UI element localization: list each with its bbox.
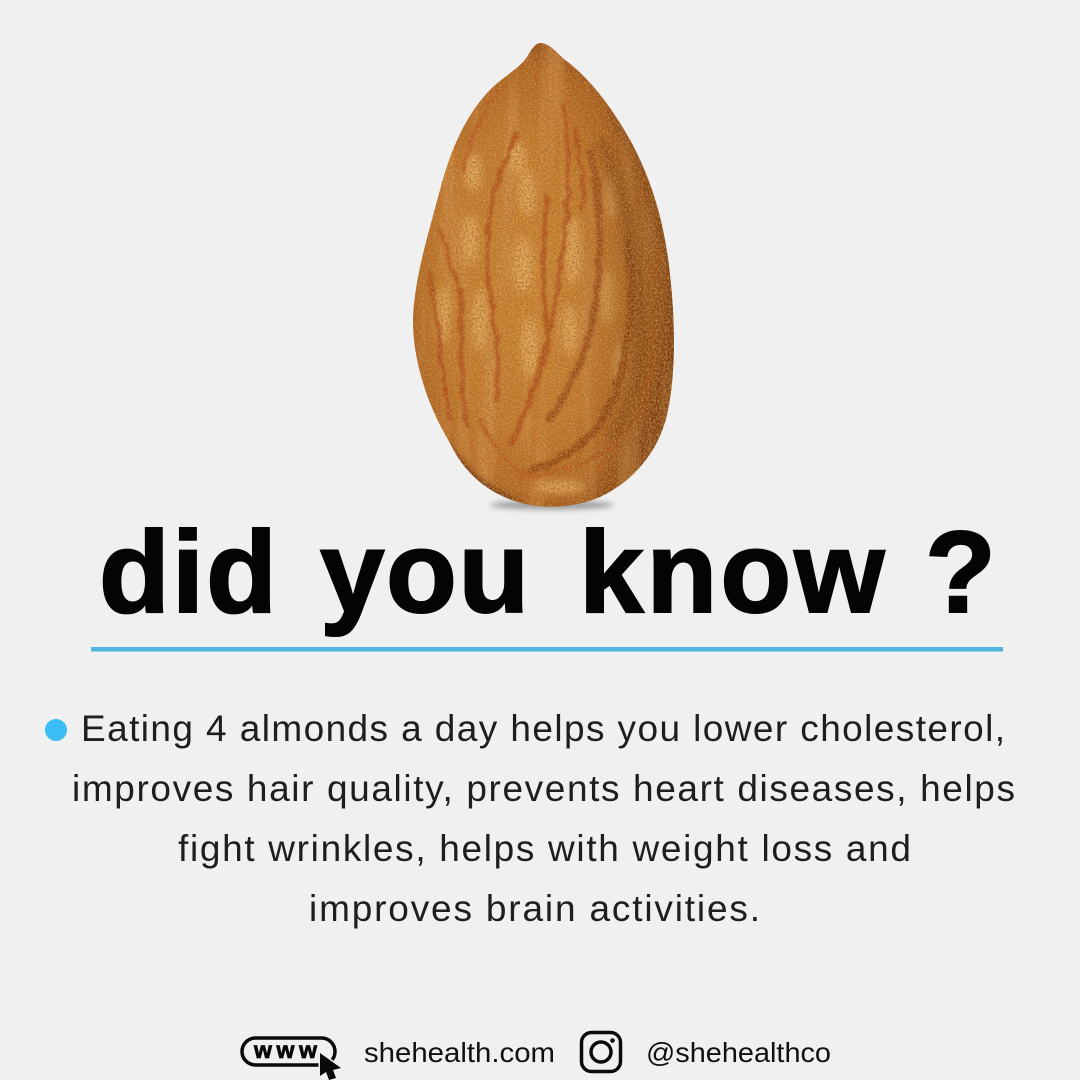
footer xyxy=(242,1032,831,1080)
almond body xyxy=(413,43,674,507)
body line 4: improves brain activities. xyxy=(309,888,760,929)
icon: www cursor xyxy=(242,1037,341,1080)
body line 3: fight wrinkles, helps with weight loss and xyxy=(178,828,911,869)
icon: www cursor: www xyxy=(253,1037,317,1063)
almond ground shadow xyxy=(490,500,614,510)
heading: you xyxy=(320,507,531,637)
icon: blue bullet xyxy=(45,719,67,741)
body text xyxy=(72,708,1015,929)
icon: instagram xyxy=(582,1032,620,1072)
website text: shehealth.com xyxy=(364,1037,555,1068)
heading: did xyxy=(99,507,279,637)
heading: ? xyxy=(925,507,996,637)
divider line xyxy=(91,647,1003,652)
instagram handle: @shehealthco xyxy=(646,1037,831,1068)
body line 1: Eating 4 almonds a day helps you lower cholesterol, xyxy=(81,708,1005,749)
heading: know xyxy=(579,507,887,637)
body line 2: improves hair quality, prevents heart diseases, helps xyxy=(72,768,1015,809)
icon: almond xyxy=(413,43,674,513)
